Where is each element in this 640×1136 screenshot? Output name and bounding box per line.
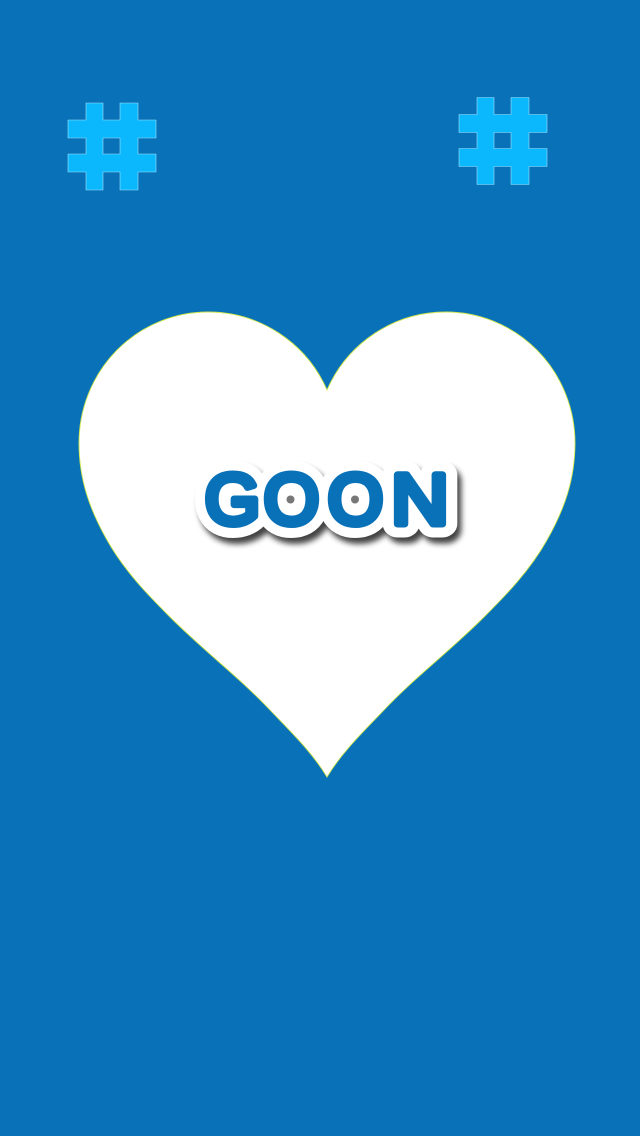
logo drop shadow <box>209 466 453 546</box>
heart <box>79 312 575 777</box>
logo: GOON <box>205 460 453 546</box>
logo white outline <box>205 460 449 540</box>
logo blue lettering <box>205 460 449 540</box>
logo hole fill <box>277 486 370 514</box>
logo hole dots <box>286 496 359 504</box>
icon: right hashtag <box>459 98 547 184</box>
icon: left hashtag <box>68 103 156 190</box>
